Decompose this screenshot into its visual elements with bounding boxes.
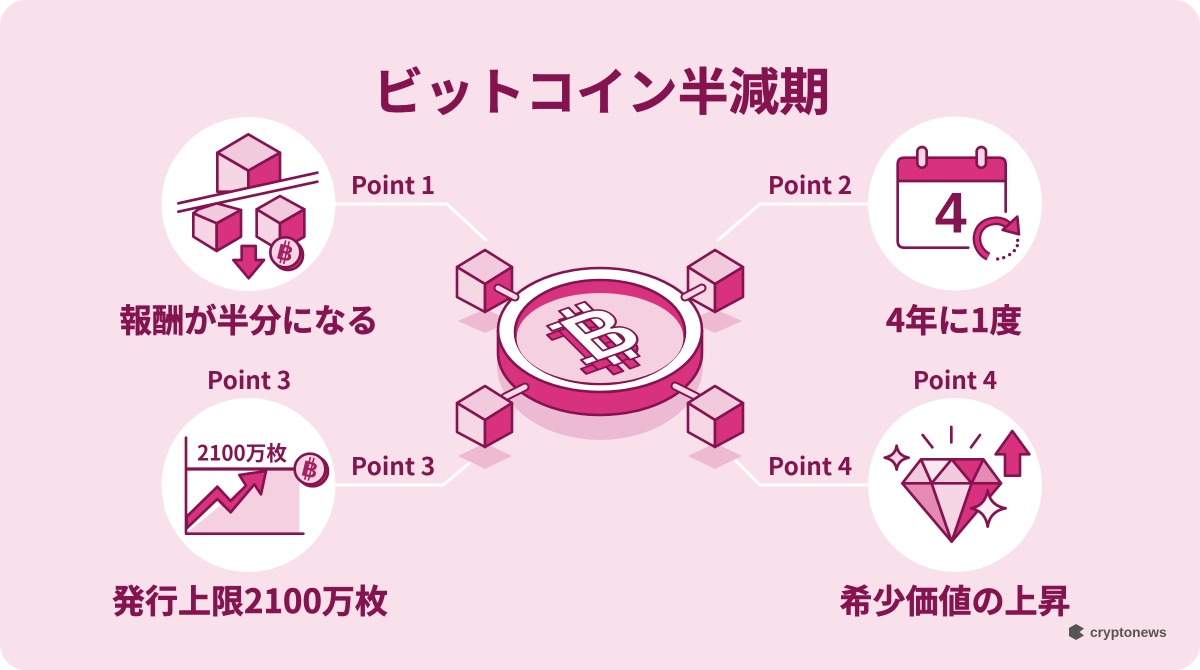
icon: bitcoin coin [295, 454, 328, 486]
icon: supply cap chart [186, 437, 328, 534]
label: point 2 heading: 4年に1度 [886, 295, 1022, 342]
connector lines [335, 204, 868, 485]
lower connector sticks [505, 386, 697, 397]
label: Point 3 above circle: Point 3 [207, 362, 291, 397]
label: Point 2: Point 2 [768, 167, 852, 202]
panel: point 2 icon circle [868, 116, 1042, 290]
icon: cycle arrow [977, 217, 1019, 261]
cube bottom right [688, 386, 743, 447]
title: ビットコイン半減期 [373, 51, 830, 125]
coin body [498, 268, 702, 415]
cube top right [688, 250, 743, 312]
label: Point 4 above circle: Point 4 [913, 362, 997, 397]
icon: supply cap chart: 2100万枚 [197, 437, 287, 467]
icon: up arrow [996, 431, 1029, 476]
label: Point 3: Point 3 [351, 448, 435, 483]
label: Point 1: Point 1 [351, 167, 435, 202]
icon: diamond [885, 427, 1029, 542]
icon: calendar: 4 [935, 182, 967, 246]
icon: down arrow [233, 246, 264, 278]
panel: point 3 icon circle [162, 398, 336, 572]
icon: bitcoin coin [270, 237, 303, 270]
upper connector sticks [498, 288, 702, 297]
cube bottom left [457, 386, 512, 447]
label: point 3 heading: 発行上限2100万枚 [112, 575, 388, 623]
icon: calendar [898, 147, 1019, 261]
cube shadows [458, 309, 742, 469]
icon: sparkles [885, 427, 1006, 527]
label: point 4 heading: 希少価値の上昇 [840, 575, 1070, 623]
logo: cryptonews: cryptonews [1090, 625, 1167, 640]
label: Point 4: Point 4 [768, 448, 852, 483]
cube top left [457, 250, 512, 312]
icon: bitcoin coin: B [299, 455, 321, 484]
label: point 1 heading: 報酬が半分になる [119, 295, 379, 342]
panel: point 1 icon circle [162, 117, 336, 291]
coin shadow [497, 290, 703, 440]
bitcoin symbol extrusion: B [542, 301, 661, 384]
bitcoin symbol face: B [542, 292, 661, 375]
coin inner floor [516, 293, 684, 383]
icon: bitcoin coin: B [274, 239, 296, 267]
panel: point 4 icon circle [868, 398, 1042, 572]
icon: blocks with halving cut [178, 134, 317, 278]
central bitcoin coin network [457, 250, 743, 469]
